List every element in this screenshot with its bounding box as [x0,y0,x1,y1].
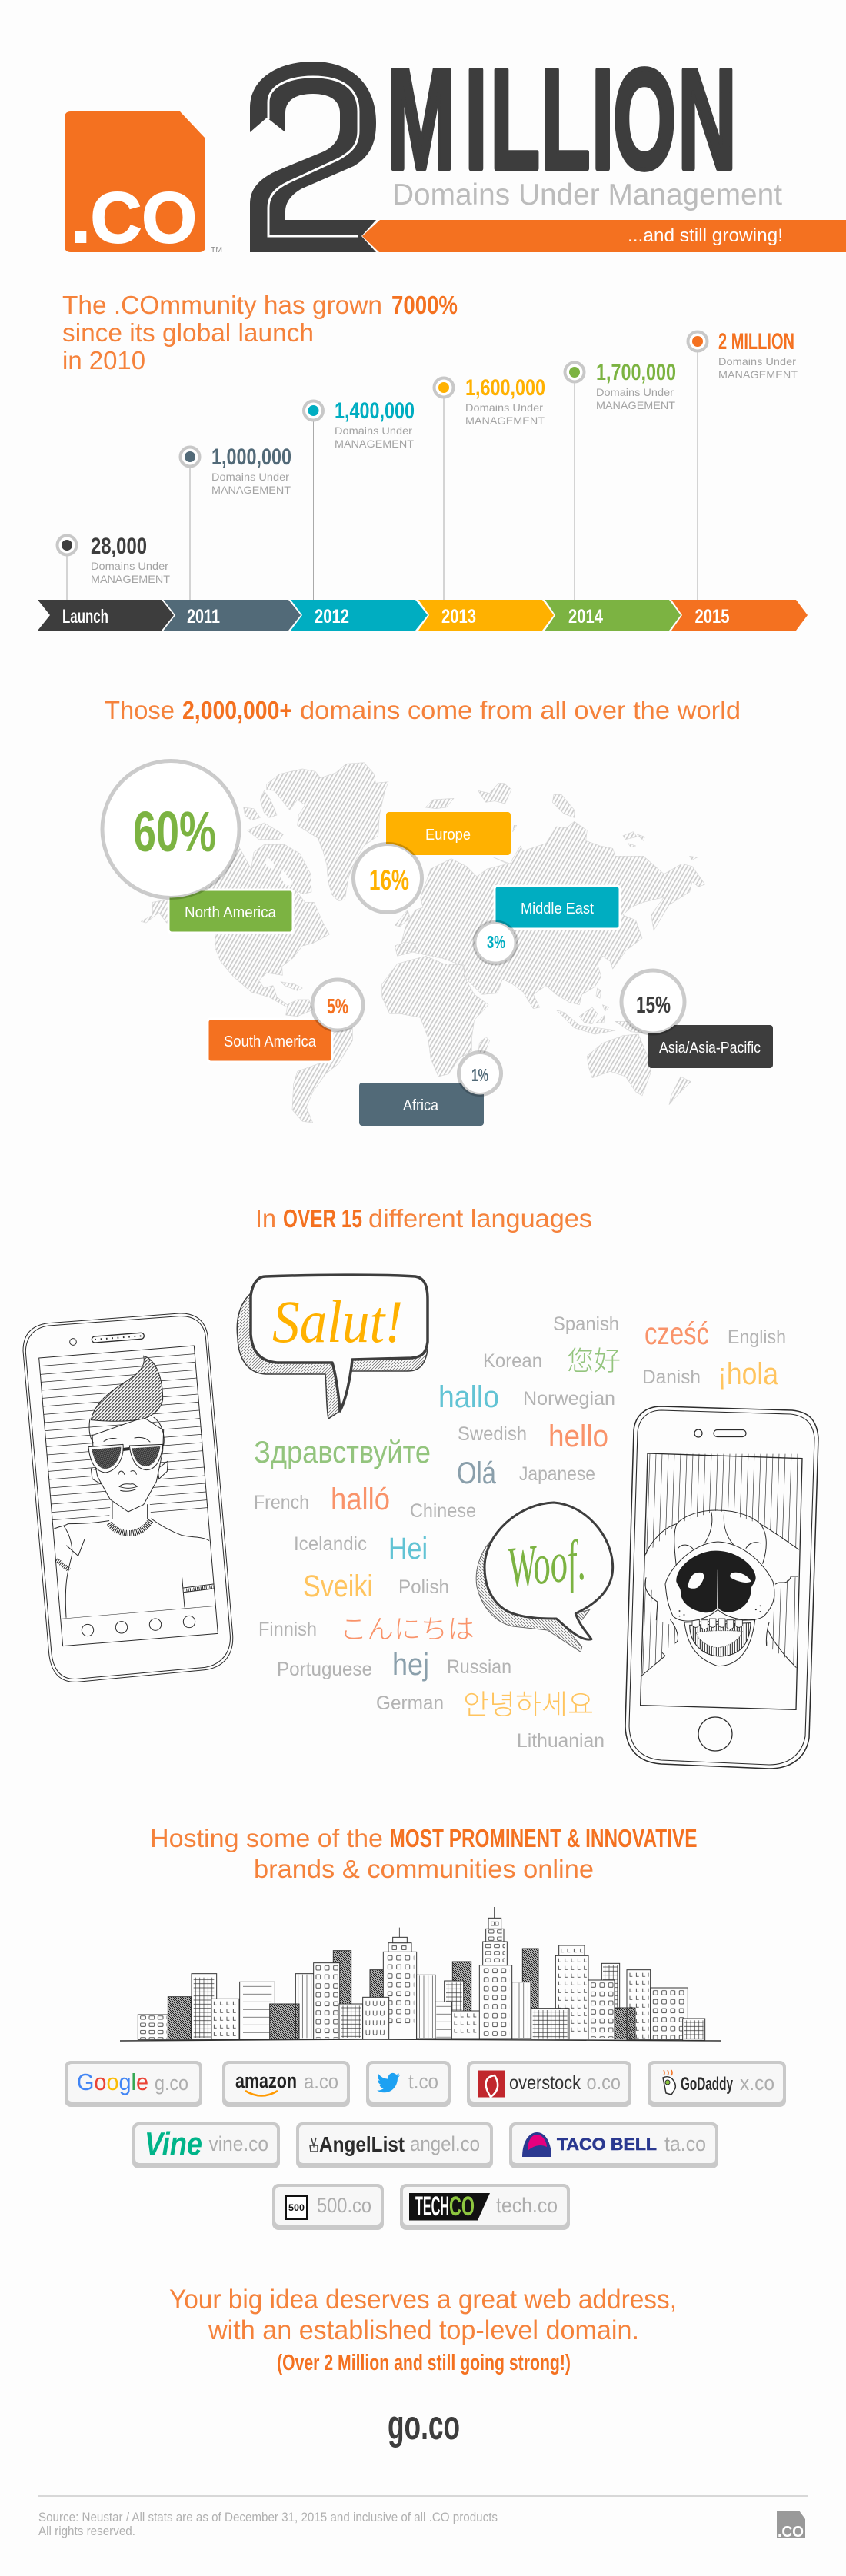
milestone 2011: Domains Under [212,471,289,483]
badge: Vine [132,2122,280,2168]
language word cloud: German [376,1692,444,1714]
MILLION wordmark: MILLION [387,40,737,200]
badge: 500: 500 [288,2202,305,2213]
language word cloud: 您好 [567,1346,621,1376]
language word cloud: Olá [457,1456,497,1490]
stat: 3%: 3% [487,932,505,952]
language word cloud: Chinese [410,1500,476,1522]
footer [38,2496,808,2541]
badge: AngelList: angel.co [410,2132,480,2155]
milestone 2012: Domains Under [335,424,412,437]
language word cloud: Hei [388,1532,428,1566]
language word cloud: English [728,1326,786,1348]
milestone 2013: Domains Under [465,401,543,414]
badge: amazon [222,2061,350,2107]
brands heading [150,1824,697,1883]
right phone with dog [625,1406,818,1769]
closing message: Your big idea deserves a great web address, [169,2285,677,2315]
speech bubble: Woof: Woof. [504,1528,588,1600]
language word cloud: Swedish [458,1423,527,1445]
chevron 2011 [163,600,301,631]
badge: amazon: amazon [235,2069,297,2092]
go.co link: go.co [388,2402,460,2448]
language word cloud: Sveiki [303,1569,373,1603]
milestone Launch [57,534,170,600]
languages heading: In [255,1204,276,1233]
skyline right half [417,1907,705,2040]
milestone 2014: Domains Under [596,386,674,398]
big numeral 2: 2 [250,230,251,231]
background stripes [40,1354,208,1520]
milestone 2012 [304,398,415,600]
language word cloud: halló [331,1483,390,1516]
badge: 500: 500.co [317,2194,371,2217]
chevron 2015: 2015 [695,606,730,627]
orange ribbon [362,220,846,252]
language word cloud: hallo [438,1380,499,1414]
badge: GoDaddy: GoDaddy [681,2074,733,2095]
stat: 5%: 5% [327,994,348,1018]
badge: Taco Bell: TACO BELL [557,2135,657,2154]
label: Europe [386,812,511,855]
milestone 2014: MANAGEMENT [596,399,675,411]
speech bubble: Salut [237,1275,428,1419]
stat: 16% [354,844,421,912]
closing message: (Over 2 Million and still going strong!) [277,2351,571,2375]
language word cloud: Danish [642,1366,701,1388]
stat: 1%: 1% [471,1065,488,1085]
badge: TECH.CO: TECH [415,2192,449,2222]
speech bubble: Salut: Salut! [272,1288,403,1355]
badge: Google [65,2061,202,2107]
chevron 2015 [671,600,808,631]
growth statement: in 2010 [62,346,145,374]
badge: AngelList: AngelList [319,2132,405,2156]
milestone 2013: 1,600,000 [465,375,545,401]
milestone 2011: MANAGEMENT [212,484,291,496]
language word cloud: Spanish [553,1313,619,1335]
languages heading: OVER 15 [283,1204,362,1233]
orange ribbon: ...and still growing! [628,225,783,246]
badge: GoDaddy: x.co [740,2072,774,2095]
milestone 2015: MANAGEMENT [718,368,798,381]
world heading: Those [105,696,175,724]
label: Europe: Europe [425,827,471,844]
label: North America: North America [185,904,277,921]
label: Middle East [495,886,620,929]
brands heading: brands & communities online [254,1855,594,1883]
language word cloud: Norwegian [523,1388,615,1409]
label: South America: South America [224,1033,317,1050]
badge: overstock: o.co [586,2071,621,2094]
label: Africa [359,1083,484,1126]
small .CO logo [777,2511,805,2541]
label: Middle East: Middle East [521,900,594,917]
chevron 2012: 2012 [315,606,349,627]
language word cloud: cześć [644,1316,709,1351]
brands heading: Hosting some of the [150,1824,383,1852]
languages heading [255,1204,592,1233]
milestone 2015: 2 MILLION [718,329,794,354]
stat: 16%: 16% [369,864,409,896]
milestone 2014 [565,360,676,600]
milestone 2015: Domains Under [718,355,796,368]
small .CO logo: .CO [778,2524,804,2541]
language word cloud: ¡hola [718,1357,779,1391]
milestone 2012: MANAGEMENT [335,438,414,450]
language word cloud: Lithuanian [517,1730,605,1752]
milestone Launch: Domains Under [91,560,168,572]
ground line [120,2039,721,2041]
skyline left half [138,1928,417,2039]
language word cloud: こんにちは [340,1615,475,1645]
badge: Vine: Vine [145,2125,202,2162]
growth statement: since its global launch [62,318,314,347]
language word cloud: 안녕하세요 [463,1689,594,1720]
milestone Launch: 28,000 [91,534,147,559]
badge: TECH.CO: CO [449,2192,475,2222]
language word cloud [254,1313,786,1752]
closing message: with an established top-level domain. [208,2315,639,2345]
language word cloud: Здравствуйте [254,1436,431,1469]
timeline [38,329,808,631]
header [65,40,846,258]
stat: 60%: 60% [133,800,216,864]
badge: TECH.CO [400,2184,570,2230]
world heading [105,696,741,724]
badge: Taco Bell [509,2122,718,2168]
speech bubble: Woof [476,1503,613,1652]
milestone 2011 [180,444,291,600]
.CO logo: TM [211,246,222,255]
map: eurasia, africa and oceania [382,783,705,1105]
badge: twitter [366,2061,451,2107]
big numeral 2 [250,62,376,252]
map: americas [141,763,388,1123]
language word cloud: Icelandic [294,1533,367,1555]
milestone 2013: MANAGEMENT [465,414,545,427]
source note: All rights reserved. [38,2524,135,2538]
chevron 2011: 2011 [187,606,220,627]
languages heading: different languages [368,1204,592,1233]
language word cloud: Korean [483,1350,542,1372]
badge: 500 [272,2184,384,2230]
stat: 15% [621,970,684,1033]
.CO logo [65,111,222,258]
badge: TECH.CO: tech.co [496,2194,558,2217]
chevron Launch: Launch [62,606,108,627]
city skyline [120,1907,721,2041]
chevron Launch [38,600,174,631]
language word cloud: Finnish [258,1619,317,1640]
left phone with man [23,1313,233,1682]
language word cloud: hej [392,1648,429,1682]
milestone Launch: MANAGEMENT [91,573,170,585]
badge: GoDaddy [648,2061,786,2107]
man figure [54,1356,214,1619]
closing message [169,2285,677,2375]
milestone 2014: 1,700,000 [596,360,676,385]
source note [38,2510,498,2538]
badge: Google: g.co [155,2072,188,2095]
badge: Google: Google [77,2068,148,2095]
milestone 2013 [434,375,545,600]
milestone 2011: 1,000,000 [212,444,291,470]
stat: 60% [102,761,239,898]
language word cloud: French [254,1492,309,1513]
stat: 5% [312,980,363,1030]
label: Asia/Asia-Pacific: Asia/Asia-Pacific [659,1040,761,1057]
world map [102,761,773,1126]
language word cloud: hello [548,1419,608,1453]
stat: 1% [458,1052,501,1095]
phone body [625,1406,818,1769]
milestone 2012: 1,400,000 [335,398,415,424]
chevron 2014: 2014 [568,606,603,627]
chevron 2013 [418,600,554,631]
growth statement: The .COmmunity has grown [62,291,382,319]
chevron 2014 [545,600,681,631]
language word cloud: Japanese [519,1463,595,1485]
subtitle: Domains Under Management [392,178,782,211]
growth statement: 7000% [391,291,458,319]
brands heading: MOST PROMINENT & INNOVATIVE [389,1824,697,1852]
label: Asia/Asia-Pacific [648,1025,773,1068]
world heading: 2,000,000+ [182,696,292,724]
badge: AngelList [296,2122,493,2168]
badge: twitter: t.co [408,2070,438,2093]
brand badges [65,2061,786,2230]
world heading: domains come from all over the world [300,696,741,724]
growth statement [62,291,458,374]
language word cloud: Russian [447,1656,511,1678]
source note: Source: Neustar / All stats are as of December 31, 2015 and inclusive of all .CO products [38,2510,498,2524]
stat: 3% [475,922,516,964]
.CO logo: .CO [71,178,197,258]
badge: overstock: overstock [509,2072,581,2094]
badge: Vine: vine.co [209,2132,268,2155]
dog illustration [641,1453,802,1709]
badge: amazon: a.co [304,2070,338,2093]
label: North America [168,890,293,933]
badge: overstock [467,2061,631,2107]
label: South America [208,1019,332,1062]
phone body [23,1313,233,1682]
milestone 2015 [688,329,798,600]
chevron 2013: 2013 [441,606,476,627]
chevron 2012 [291,600,428,631]
language word cloud: Portuguese [277,1659,372,1680]
label: Africa: Africa [403,1097,439,1114]
badge: Taco Bell: ta.co [664,2132,706,2155]
stat: 15%: 15% [636,991,671,1018]
language word cloud: Polish [398,1576,449,1598]
